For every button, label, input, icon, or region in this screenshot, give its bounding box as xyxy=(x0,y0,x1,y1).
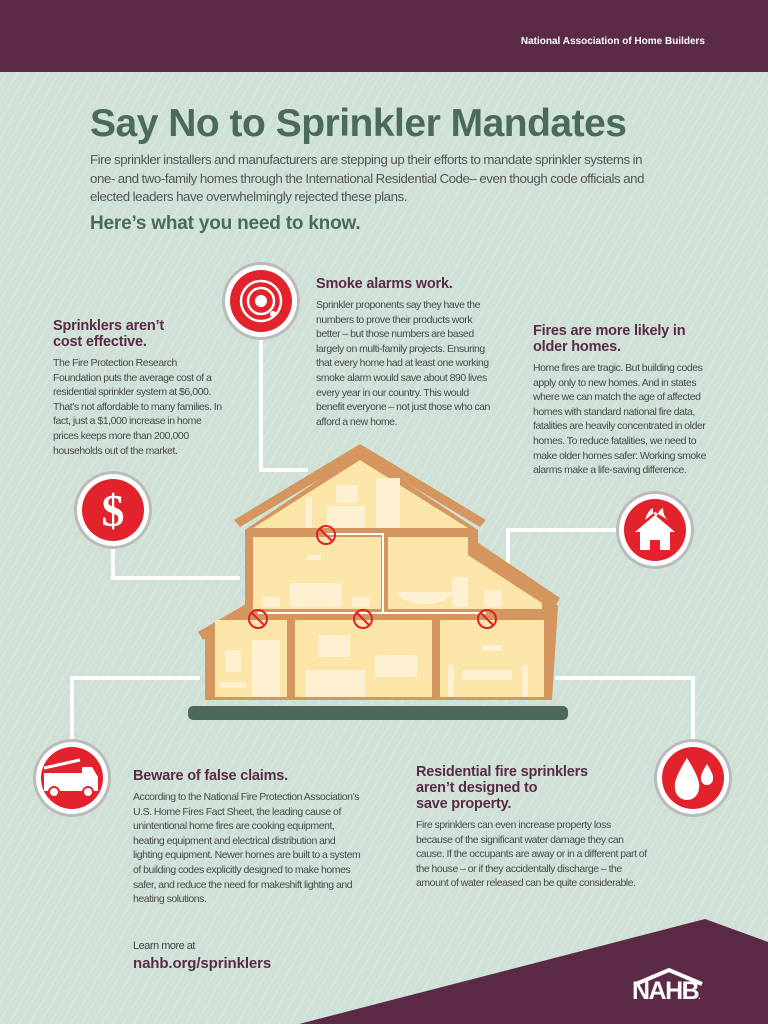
icon: water drops xyxy=(654,739,732,817)
NAHB logo: NAHB. xyxy=(632,977,699,1005)
header org name: National Association of Home Builders xyxy=(521,36,705,47)
panel: older homes: Home fires are tragic. But building codes apply only to new homes. And in states where we can match the age of affected homes with standard national fire data, fatalities are heavily concentrated in older homes. To reduce fatalities, we need to make older homes safer: Working smoke alarms make a life-saving difference. xyxy=(533,362,706,476)
pipes xyxy=(326,534,486,613)
icon: dollar xyxy=(74,471,152,549)
panel: older homes: Fires are more likely in xyxy=(533,323,685,339)
base xyxy=(188,706,568,720)
panel: smoke alarms work: Smoke alarms work. xyxy=(316,276,453,292)
body xyxy=(205,452,558,700)
learn more link xyxy=(133,940,271,972)
panel: save property: Fire sprinklers can even increase property loss because of the significant water damage they can cause. If the occupants are away or in a different part of the house – or if they accidentally discharge – the amount of water released can be quite considerable. xyxy=(416,819,647,889)
panel: cost effective: cost effective. xyxy=(53,334,147,350)
icon: fire truck xyxy=(33,739,111,817)
panel: false claims: Beware of false claims. xyxy=(133,768,288,784)
panel: save property xyxy=(416,764,648,889)
icon: burning house xyxy=(616,491,694,569)
icon: dollar: $ xyxy=(102,485,124,536)
no-sprinkler symbols xyxy=(249,526,496,628)
furniture xyxy=(220,478,528,697)
panel: save property: save property. xyxy=(416,796,511,812)
panel: false claims: According to the National Fire Protection Association’s U.S. Home Fires Fact Sheet, the leading cause of unintentional home fires are cooking equipment, heating equipment and electrical distribution and lighting equipment. Newer homes are built to a system of building codes explicitly designed to make homes safer, and reduce the need for makeshift lighting and heating solutions. xyxy=(133,791,360,905)
panel: save property: Residential fire sprinklers xyxy=(416,764,588,780)
panel: older homes: older homes. xyxy=(533,339,621,355)
icon: smoke alarm xyxy=(222,262,300,340)
panel: cost effective: Sprinklers aren’t xyxy=(53,318,164,334)
subheading: Here’s what you need to know. xyxy=(90,213,360,234)
title: Say No to Sprinkler Mandates xyxy=(90,102,626,145)
roofs xyxy=(234,444,486,527)
learn more link: Learn more at xyxy=(133,940,195,952)
panel: smoke alarms work: Sprinkler proponents say they have the numbers to prove their products work better – but those numbers are based largely on multi-family projects. Ensuring that every home had at least one working smoke alarm would save about 890 lives every year in our country. This would benefit everyone – not just those who can afford a new home. xyxy=(316,299,490,428)
panel: cost effective: The Fire Protection Research Foundation puts the average cost of a residential sprinkler system at $6,000. That’s not affordable to many families. In fact, just a $1,000 increase in home prices keeps more than 200,000 households out of the market. xyxy=(53,357,222,457)
intro text: Fire sprinkler installers and manufacturers are stepping up their efforts to mandate sprinkler systems in one- and two-family homes through the International Residential Code– even though code officials and elected leaders have overwhelmingly rejected these plans. xyxy=(90,152,644,204)
learn more link: nahb.org/sprinklers xyxy=(133,955,271,972)
rooms xyxy=(253,460,468,528)
header band xyxy=(0,0,768,72)
panel: save property: aren’t designed to xyxy=(416,780,537,796)
